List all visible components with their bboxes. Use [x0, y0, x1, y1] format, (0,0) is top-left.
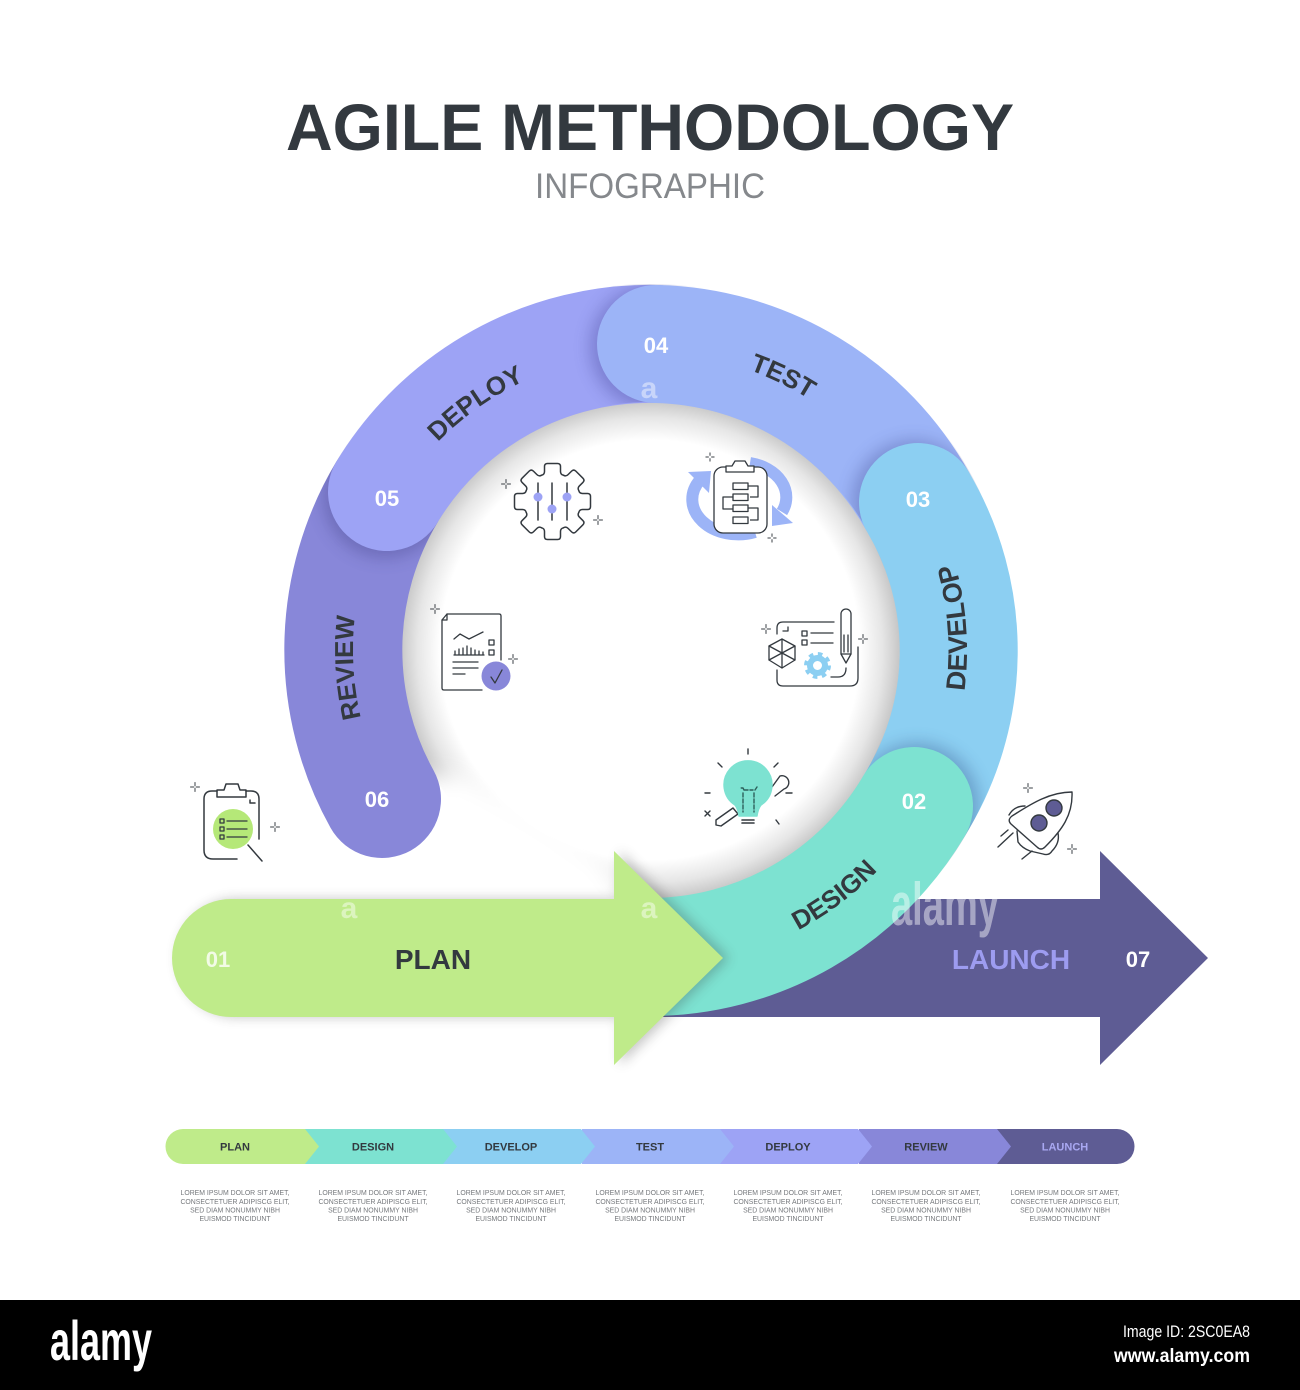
label: deploy: DEPLOY: [426, 364, 519, 441]
legend segment: deploy: [720, 1129, 872, 1164]
step numbers: 03: [906, 487, 930, 512]
watermark: alamy: [891, 871, 999, 938]
description: deploy: LOREM IPSUM DOLOR SIT AMET,: [734, 1190, 843, 1197]
description: test: [595, 1190, 705, 1223]
step numbers: 06: [365, 787, 389, 812]
arrow: plan: [172, 851, 723, 1065]
cap shadow: test: [584, 284, 687, 404]
image id: Image ID: 2SC0EA8: [1123, 1322, 1250, 1341]
description: deploy: CONSECTETUER ADIPISCG ELIT,: [733, 1199, 843, 1206]
icon: design light bulb with pencil: [705, 749, 792, 826]
label: develop: DEVELOP: [938, 567, 968, 690]
legend segment: review: [859, 1129, 1011, 1164]
description: review: [871, 1190, 981, 1223]
description: launch: LOREM IPSUM DOLOR SIT AMET,: [1010, 1190, 1120, 1197]
ring segment: review: [343, 492, 387, 799]
description: plan: [180, 1190, 290, 1223]
ring segment: deploy: [387, 344, 656, 492]
description: review: SED DIAM NONUMMY NIBH: [881, 1208, 971, 1214]
legend segment: design: [305, 1129, 457, 1164]
legend segment: launch: [997, 1129, 1134, 1164]
description: design: LOREM IPSUM DOLOR SIT AMET,: [318, 1190, 428, 1197]
description: design: SED DIAM NONUMMY NIBH: [328, 1208, 418, 1214]
label: launch: LAUNCH: [952, 944, 1070, 975]
description: test: LOREM IPSUM DOLOR SIT AMET,: [596, 1190, 705, 1197]
description: plan: CONSECTETUER ADIPISCG ELIT,: [180, 1199, 290, 1206]
cap shadow: deploy: [323, 434, 447, 558]
legend labels: TEST: [636, 1142, 664, 1154]
legend labels: DESIGN: [352, 1142, 394, 1154]
step numbers: 05: [375, 486, 399, 511]
step numbers: 04: [644, 333, 669, 358]
label: review: REVIEW: [335, 614, 360, 720]
icon: launch rocket: [998, 784, 1076, 859]
icon: deploy gear with sliders: [502, 464, 602, 540]
icon: review report with check: [430, 604, 518, 690]
website: www.alamy.com: [1113, 1346, 1250, 1367]
description: develop: [456, 1190, 566, 1223]
description: deploy: [733, 1190, 843, 1223]
watermark: [341, 372, 999, 938]
description: plan: EUISMOD TINCIDUNT: [199, 1216, 271, 1223]
legend segment: test: [582, 1129, 734, 1164]
legend descriptions: [180, 1190, 1120, 1223]
description: test: EUISMOD TINCIDUNT: [614, 1216, 686, 1223]
description: design: [318, 1190, 428, 1223]
description: launch: SED DIAM NONUMMY NIBH: [1020, 1208, 1110, 1214]
description: develop: CONSECTETUER ADIPISCG ELIT,: [456, 1199, 566, 1206]
description: test: SED DIAM NONUMMY NIBH: [605, 1208, 695, 1214]
ring segment: test: [656, 344, 918, 502]
description: plan: SED DIAM NONUMMY NIBH: [190, 1208, 280, 1214]
legend segment: develop: [443, 1129, 595, 1164]
description: launch: EUISMOD TINCIDUNT: [1029, 1216, 1101, 1223]
description: deploy: SED DIAM NONUMMY NIBH: [743, 1208, 833, 1214]
footer logo: alamy: [50, 1309, 152, 1372]
ring segment: design: [650, 806, 914, 957]
label: design: DESIGN: [791, 859, 876, 930]
description: develop: SED DIAM NONUMMY NIBH: [466, 1208, 556, 1214]
description: launch: [1010, 1190, 1120, 1223]
description: design: CONSECTETUER ADIPISCG ELIT,: [318, 1199, 428, 1206]
description: plan: LOREM IPSUM DOLOR SIT AMET,: [180, 1190, 290, 1197]
watermark: a: [341, 892, 358, 925]
label: test: TEST: [754, 353, 818, 396]
description: review: LOREM IPSUM DOLOR SIT AMET,: [872, 1190, 981, 1197]
title: AGILE METHODOLOGY: [286, 90, 1014, 164]
description: design: EUISMOD TINCIDUNT: [337, 1216, 409, 1223]
description: review: CONSECTETUER ADIPISCG ELIT,: [871, 1199, 981, 1206]
legend segment: plan: [166, 1129, 319, 1164]
description: review: EUISMOD TINCIDUNT: [890, 1216, 962, 1223]
watermark: a: [641, 892, 658, 925]
description: develop: LOREM IPSUM DOLOR SIT AMET,: [456, 1190, 566, 1197]
icon: develop blueprint: [762, 609, 868, 686]
icon: plan clipboard with magnifier: [190, 782, 280, 861]
step numbers: [206, 333, 1150, 972]
legend labels: DEVELOP: [485, 1142, 537, 1154]
legend bar: [166, 1129, 1134, 1164]
watermark: a: [641, 372, 658, 405]
description: deploy: EUISMOD TINCIDUNT: [752, 1216, 824, 1223]
legend labels: LAUNCH: [1042, 1142, 1088, 1154]
inner circle shadow: [300, 400, 900, 935]
label: plan: PLAN: [395, 944, 471, 975]
legend labels: [220, 1142, 1088, 1154]
description: develop: EUISMOD TINCIDUNT: [475, 1216, 547, 1223]
step numbers: 01: [206, 947, 230, 972]
description: test: CONSECTETUER ADIPISCG ELIT,: [595, 1199, 705, 1206]
subtitle: INFOGRAPHIC: [535, 167, 765, 206]
legend labels: REVIEW: [904, 1142, 948, 1154]
footer bar: [0, 1300, 1300, 1390]
step numbers: 02: [902, 789, 926, 814]
description: launch: CONSECTETUER ADIPISCG ELIT,: [1010, 1199, 1120, 1206]
cap shadow: design: [855, 743, 979, 867]
ring segment: develop: [914, 502, 959, 806]
icon: test clipboard with cycle arrows: [688, 452, 793, 542]
legend labels: PLAN: [220, 1142, 250, 1154]
step numbers: 07: [1126, 947, 1150, 972]
legend labels: DEPLOY: [765, 1142, 811, 1154]
arrow: launch: [650, 851, 1208, 1065]
arrow shadow: plan: [178, 851, 729, 1065]
cap shadow: develop: [846, 434, 982, 522]
